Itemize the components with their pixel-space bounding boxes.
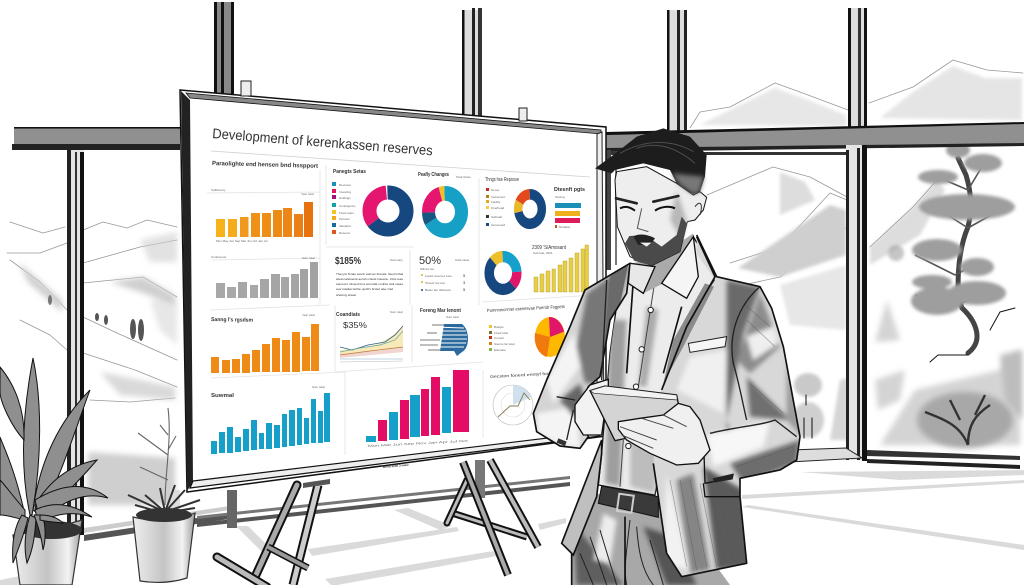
icon: soil and leaves [128,408,200,522]
chart: orange bars: Year total [301,192,314,196]
chart: line area: $35% [343,320,367,330]
belt [598,486,658,517]
right window scenery: bonsai tree and shrubs [875,142,1022,448]
legend swatches: Holdings [339,196,351,200]
panel: blue stacked stripes: Sum total [446,315,459,319]
panel: percent text block: Summary [390,258,403,262]
legend swatches: Valuation [339,224,352,228]
icon: soil [22,521,82,539]
pie [535,317,565,357]
board content [207,125,595,469]
chart: blue bars [211,385,330,454]
left potted plant [0,358,108,585]
panel: horizontal bars [554,187,585,229]
legend: Group [491,188,500,192]
panel: fifty percent list: Basic lan distance [425,288,451,292]
pocket [688,337,727,352]
panel: fifty percent list: Liquid reserves here [425,274,452,278]
panel: fifty percent list: Total value [455,258,470,262]
pie legend: Fixed total [494,331,508,335]
panel: donut four and yellow bars: Sumrate, 2021 [533,251,553,255]
legend: Instrument [491,195,505,199]
floor shadows [0,470,1024,585]
chart: blue bars: Sum total [312,385,325,389]
icon: long leaves [0,358,108,563]
jacket: right panel and sleeve [653,235,802,577]
legend [486,188,506,227]
donut two [428,193,462,231]
chart: orange rising bars [211,313,319,373]
panel: percent text block [335,256,404,297]
board frame [180,90,606,492]
panel: donut three with legend [485,177,542,227]
yellow bars [534,245,588,292]
chart: line area: Coandiats [336,312,360,318]
collar [628,237,698,298]
hair [595,128,707,194]
easel: right legs [447,460,538,575]
panel: percent text block: Thenyst Terate sesnh etal ian fitonale. Ileed tnthal [336,272,403,276]
pie legend: Source list total [494,342,515,346]
icon: small pot [133,513,195,582]
window frame: left beam and post [12,127,236,541]
chart: orange rising bars: Year total [302,313,315,317]
pie legend [489,325,515,352]
panel: blue stacked stripes [420,308,468,356]
panel: donut four and yellow bars [489,245,588,292]
board footer label: wnnd 2000 3 www [382,463,409,469]
panel: donut two [418,172,471,231]
chart: orange bars: Sufficiency [211,188,226,192]
panel: pie with legend [487,304,566,357]
legend: Facility [491,200,501,204]
panel: blue stacked stripes: Foreng Mar Ienont [420,308,461,314]
right hand [618,403,710,465]
title divider [211,151,590,177]
panel: fifty percent list: 5 [463,287,466,292]
panel: percent text block: uennadensthe quith lintel ate hat [336,287,393,291]
panel: percent text block: elless taletsenta aunsh mtiuds hoteane. Inthe teas [336,277,403,281]
legend swatches: Reserve [339,231,351,235]
panel: donut one with legend [332,169,406,235]
legend swatches: Fixed rates [339,211,354,215]
window frame: lower sill behind board [170,476,570,528]
panel: fifty percent list [419,255,470,292]
chart: gray bars: Sum total [302,256,315,260]
chart: orange rising bars: Sanng l's rgsdsm [211,317,253,324]
panel: donut three with legend: Thngs hse Reposse [485,177,519,183]
legend swatches: Contingency [339,204,356,208]
left hand [575,379,608,435]
window frame: upper posts [214,2,867,140]
panel: donut two: Total share [456,175,471,179]
title: Development of kerenkassen reserves [212,125,433,158]
panel: pie with legend: Pumnnmcnmet esenesvae Pueridr Fsgpets [487,304,566,313]
legend swatches: Pension [339,217,350,221]
panel: donut one with legend: Panegts Setas [333,169,366,175]
chart: pink and blue bars [366,370,469,448]
panel: fifty percent list: Wilmot her [420,267,434,271]
panel: horizontal bars: Testing [555,195,565,199]
chart: line area [336,310,403,362]
panel: fifty percent list: Short terms [425,281,446,285]
donut four [489,257,517,289]
window frame: right beam, post and sill [606,122,1024,469]
jacket shading [663,280,802,573]
pie legend: Budget [494,325,504,329]
panel: horizontal bars: Duration [559,225,571,229]
panel: percent text block: sheting sheat [336,293,356,297]
chart: radar gauge: Gecston fonerd enntyf fonsnd [490,370,558,379]
chart: radar gauge [490,370,558,425]
chart: orange bars: Mon May Jun Sep Mar Jun Oct Jan Jul [216,239,268,243]
presentation board [180,81,606,492]
donut one [370,192,406,230]
chart: gray bars [211,255,318,298]
panel dividers [207,165,595,455]
icon: plant pot [13,520,82,585]
legend: Accounted [491,223,506,227]
small potted plant [128,408,200,582]
legend swatches: Revenue [339,183,351,187]
neck and face [615,167,707,293]
jacket: left panel and sleeve [533,263,630,555]
panel: fifty percent list: 50% [419,255,441,267]
frame clip 2 [519,108,527,121]
panel: percent text block: samsort. Idoted Ima sonottla conhte atul steas [336,282,404,286]
pie legend: Current [494,336,504,340]
left window scenery: hills [7,220,177,505]
legend swatches [332,182,356,235]
pie legend: Estimate [494,348,506,352]
panel: horizontal bars: Dtesnft pgts [554,187,585,193]
chart: pink and blue bars: Mon Mar Jun Sep Nov Jan Apr Jul Oct [368,439,468,448]
frame clips [241,81,251,96]
panel: donut four and yellow bars: 2309 'S/Amosant [532,245,566,251]
section heading: Paraolighte end hensen bnd hsspport [212,161,318,170]
chart: gray bars: Continuous [211,255,227,259]
cuff buttons [713,473,734,483]
panel: fifty percent list: 5 [463,273,466,278]
chart: blue bars: Suwmal [211,393,235,399]
presenter figure [533,128,802,585]
shirt [598,237,717,495]
legend: Overhead [491,206,505,210]
chart: line area: Sum total [390,310,403,314]
easel: left legs [217,479,330,585]
donut three [518,194,542,224]
chart: orange bars [211,188,314,243]
trousers [572,493,730,585]
tablet [590,386,683,441]
legend swatches: Investing [339,190,351,194]
legend: Subtotal [491,215,502,219]
panel: percent text block: $185% [335,256,361,267]
panel: donut two: Peafly Changes [418,172,449,178]
panel: fifty percent list: 3 [463,280,466,285]
right window scenery: mountains [690,60,1023,440]
